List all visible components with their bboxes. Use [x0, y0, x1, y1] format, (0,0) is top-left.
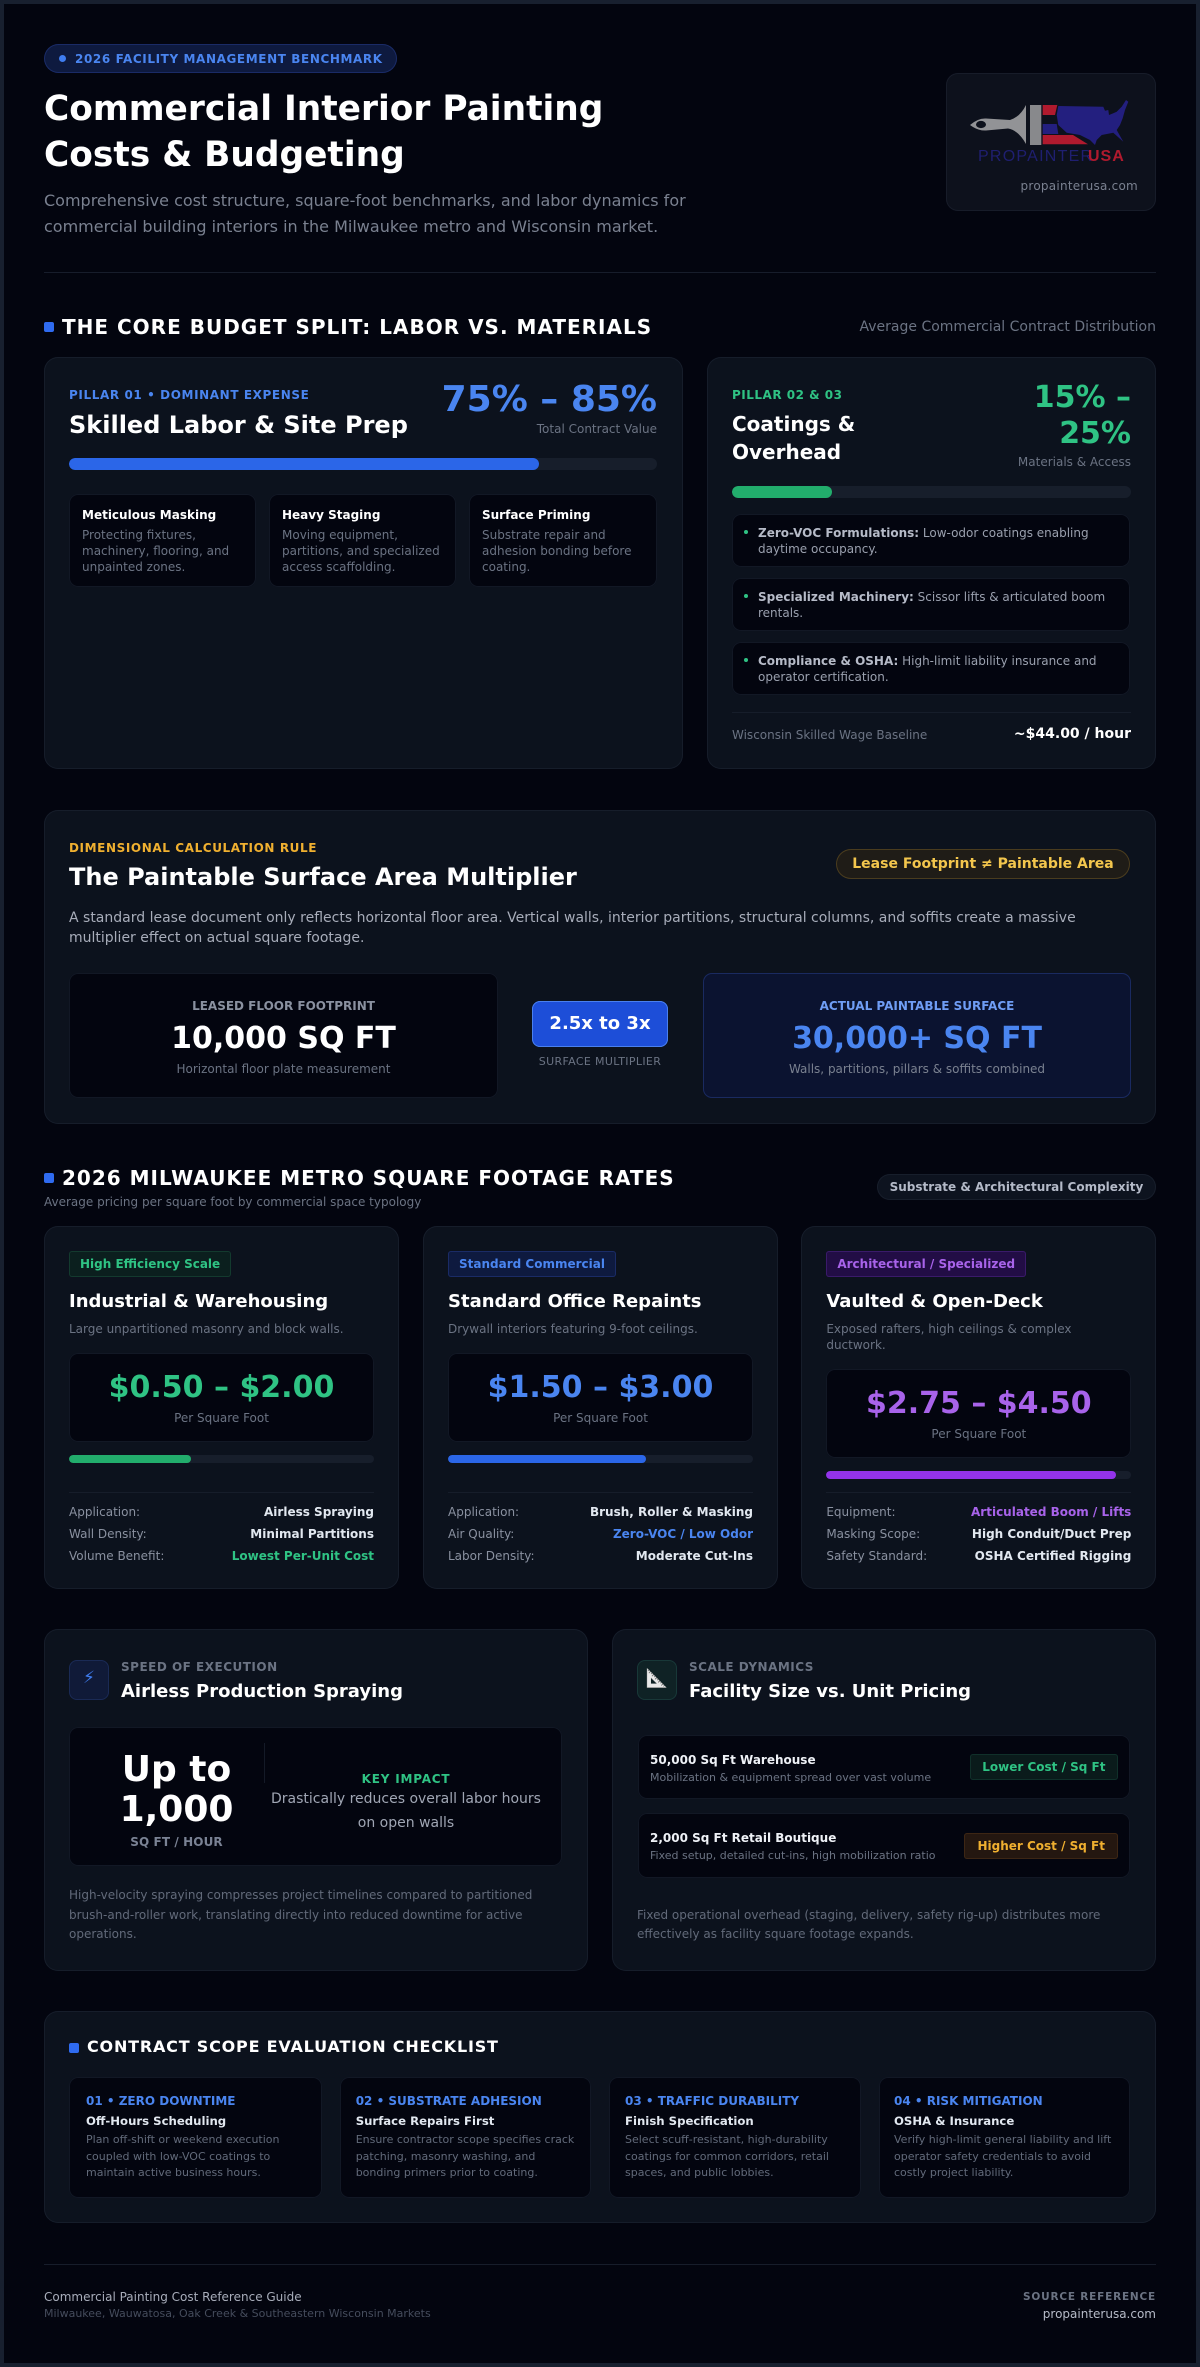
price box [69, 1353, 374, 1442]
footer markets: Milwaukee, Wauwatosa, Oak Creek & Southeastern Wisconsin Markets [44, 2307, 431, 2320]
bullet [744, 594, 748, 598]
key impact text: Drastically reduces overall labor hours [271, 1791, 541, 1807]
row: masking scope [826, 1527, 1131, 1541]
row: masking scope: High Conduit/Duct Prep [972, 1527, 1131, 1541]
key impact label: KEY IMPACT [362, 1772, 450, 1786]
item text [758, 526, 1089, 556]
description [69, 910, 1076, 946]
card title: Surface Priming [482, 508, 590, 522]
row: boutique [638, 1813, 1130, 1878]
price bar [826, 1471, 1131, 1479]
cost badge [970, 1754, 1118, 1780]
badge: benchmark [44, 44, 397, 73]
step text: Select scuff-resistant, high-durability [625, 2133, 828, 2146]
marker [44, 322, 54, 332]
section heading: budget split [44, 315, 1156, 339]
eyebrow: SPEED OF EXECUTION [121, 1660, 278, 1674]
card text: access scaffolding. [282, 560, 395, 574]
checklist card 1 [69, 2077, 322, 2198]
unit: Per Square Foot [931, 1427, 1026, 1441]
card: masking [69, 494, 256, 587]
step text: coatings for common corridors, retail [625, 2150, 829, 2162]
spray rate box [69, 1727, 562, 1866]
subtitle: Comprehensive cost structure, square-foot benchmarks, and labor dynamics for [44, 191, 686, 210]
item: compliance [732, 642, 1130, 695]
pillar label: PILLAR 01 • DOMINANT EXPENSE [69, 388, 309, 402]
wage label: Wisconsin Skilled Wage Baseline [732, 728, 927, 742]
rule label: DIMENSIONAL CALCULATION RULE [69, 841, 317, 855]
materials bar fill [732, 486, 832, 498]
panel: surface area multiplier [44, 810, 1156, 1124]
step text: patching, masonry washing, and [356, 2150, 535, 2162]
cost badge [964, 1833, 1118, 1859]
price bar fill [448, 1455, 646, 1463]
row: wall density: Minimal Partitions [250, 1527, 374, 1541]
card title: Heavy Staging [282, 508, 380, 522]
row: labor density: Moderate Cut-Ins [636, 1549, 753, 1563]
rate value: 1,000 [120, 1789, 233, 1830]
title: Costs & Budgeting [44, 134, 405, 174]
callout pill [836, 849, 1130, 879]
card description: ductwork. [826, 1338, 886, 1352]
note: Walls, partitions, pillars & soffits combined [789, 1062, 1045, 1076]
panel title: Airless Production Spraying [121, 1681, 403, 1702]
step text [86, 2133, 280, 2179]
item text [758, 654, 1097, 684]
price bar fill [826, 1471, 1116, 1479]
complexity pill: Substrate & Architectural Complexity [890, 1180, 1143, 1194]
step label: 01 • ZERO DOWNTIME [86, 2094, 235, 2108]
explanation [637, 1908, 1100, 1941]
step text: Ensure contractor scope specifies crack [356, 2133, 574, 2146]
step text: spaces, and public lobbies. [625, 2166, 774, 2179]
row: application: Airless Spraying [264, 1505, 374, 1519]
row: safety standard: OSHA Certified Rigging [975, 1549, 1131, 1563]
rate unit: SQ FT / HOUR [130, 1835, 223, 1849]
row: equipment: Articulated Boom / Lifts [971, 1505, 1131, 1519]
item text: Zero-VOC Formulations: Low-odor coatings enabling [758, 526, 1089, 540]
multiplier badge: 2.5x to 3x [549, 1013, 651, 1034]
panel: facility size vs unit pricing [612, 1629, 1156, 1971]
section heading: square footage rates [44, 1166, 1156, 1209]
panel: contract scope checklist [44, 2011, 1156, 2223]
row note: Mobilization & equipment spread over vast volume [650, 1771, 931, 1784]
item text: Specialized Machinery: Scissor lifts & articulated boom [758, 590, 1105, 604]
row: application [69, 1505, 374, 1519]
badge dot [59, 55, 66, 62]
label: LEASED FLOOR FOOTPRINT [192, 999, 375, 1013]
subtitle [44, 191, 686, 236]
card description: Exposed rafters, high ceilings & complex [826, 1322, 1072, 1336]
panel heading: CONTRACT SCOPE EVALUATION CHECKLIST [87, 2037, 499, 2056]
panel: standard office repaints [423, 1226, 778, 1589]
row: safety standard [826, 1549, 1131, 1563]
logo card [946, 73, 1156, 211]
card title: Standard Office Repaints [448, 1291, 702, 1312]
card text: Protecting fixtures, [82, 528, 196, 542]
step text: coupled with low-VOC coatings to [86, 2150, 270, 2162]
marker [44, 1173, 54, 1183]
section subtitle: Average pricing per square foot by commercial space typology [44, 1195, 421, 1209]
cost badge: Higher Cost / Sq Ft [977, 1839, 1105, 1853]
card title: Vaulted & Open-Deck [826, 1291, 1043, 1312]
row: air quality: Zero-VOC / Low Odor [613, 1527, 753, 1541]
row: air quality: Air Quality: [448, 1527, 514, 1541]
checklist card 2 [340, 2077, 591, 2198]
panel: skilled labor [44, 357, 683, 769]
percentage caption: Materials & Access [1018, 455, 1131, 469]
row: application: Brush, Roller & Masking [590, 1505, 753, 1519]
row title: 50,000 Sq Ft Warehouse [650, 1753, 816, 1767]
explanation: operations. [69, 1927, 137, 1941]
row: equipment [826, 1505, 1131, 1519]
multiplier badge [532, 1001, 668, 1047]
card description [826, 1322, 1072, 1352]
item text: rentals. [758, 606, 803, 620]
tag: High Efficiency Scale [80, 1257, 220, 1271]
card text [282, 528, 440, 574]
percentage [1034, 380, 1131, 451]
card: staging [269, 494, 456, 587]
card text: coating. [482, 560, 530, 574]
rate value: Up to [122, 1749, 231, 1790]
step label: 02 • SUBSTRATE ADHESION [356, 2094, 542, 2108]
card title: Industrial & Warehousing [69, 1291, 328, 1312]
row: masking scope: Masking Scope: [826, 1527, 920, 1541]
row: safety standard: Safety Standard: [826, 1549, 927, 1563]
icon: lightning bolt [69, 1660, 109, 1700]
row: volume benefit: Lowest Per-Unit Cost [232, 1549, 374, 1563]
unit: Per Square Foot [553, 1411, 648, 1425]
icon: paintbrush and USA map logo [970, 100, 1128, 165]
step title: Off-Hours Scheduling [86, 2114, 226, 2128]
tag [448, 1251, 616, 1277]
price: $2.75 – $4.50 [866, 1386, 1092, 1421]
row: equipment: Equipment: [826, 1505, 896, 1519]
step text: costly project liability. [894, 2166, 1013, 2179]
row title: 2,000 Sq Ft Retail Boutique [650, 1831, 836, 1845]
tag [69, 1251, 231, 1277]
price: $0.50 – $2.00 [109, 1370, 334, 1405]
actual surface box [703, 973, 1131, 1098]
wage value: ~$44.00 / hour [1014, 726, 1131, 742]
percentage: 15% – [1034, 380, 1131, 415]
label: ACTUAL PAINTABLE SURFACE [820, 999, 1014, 1013]
leased footprint box [69, 973, 498, 1098]
explanation [69, 1888, 532, 1941]
card text [482, 528, 631, 574]
labor bar [69, 458, 657, 470]
bullet [744, 658, 748, 662]
card description: Drywall interiors featuring 9-foot ceilings. [448, 1322, 698, 1336]
icon: paintbrush and USA map logo: PROPAINTER [978, 148, 1093, 165]
value: 10,000 SQ FT [171, 1021, 396, 1056]
pillar label: PILLAR 02 & 03 [732, 388, 842, 402]
value: 30,000+ SQ FT [792, 1021, 1042, 1056]
section title: THE CORE BUDGET SPLIT: LABOR VS. MATERIALS [62, 315, 652, 339]
header [44, 44, 1156, 273]
row note: Fixed setup, detailed cut-ins, high mobilization ratio [650, 1849, 936, 1862]
row: labor density [448, 1549, 753, 1563]
step text: Plan off-shift or weekend execution [86, 2133, 280, 2146]
panel: airless production spraying [44, 1629, 588, 1971]
note: Horizontal floor plate measurement [176, 1062, 390, 1076]
item: zero-VOC [732, 514, 1130, 567]
panel title [732, 412, 855, 464]
card text: Moving equipment, [282, 528, 398, 542]
row: labor density: Labor Density: [448, 1549, 535, 1563]
checklist card 3 [609, 2077, 861, 2198]
item text: operator certification. [758, 670, 889, 684]
row: wall density [69, 1527, 374, 1541]
step label: 04 • RISK MITIGATION [894, 2094, 1043, 2108]
row: application [448, 1505, 753, 1519]
badge text: 2026 FACILITY MANAGEMENT BENCHMARK [75, 52, 383, 66]
card text: unpainted zones. [82, 560, 185, 574]
price: $1.50 – $3.00 [488, 1370, 713, 1405]
bullet [744, 530, 748, 534]
row: application: Application: [69, 1505, 140, 1519]
panel title: The Paintable Surface Area Multiplier [69, 863, 577, 891]
complexity pill [877, 1174, 1156, 1200]
checklist card 4 [879, 2077, 1130, 2198]
explanation: brush-and-roller work, translating directly into reduced downtime for active [69, 1908, 522, 1922]
percentage: 75% – 85% [442, 379, 657, 420]
title [44, 88, 603, 174]
logo url: propainterusa.com [1021, 179, 1138, 193]
panel title: Overhead [732, 440, 841, 464]
subtitle: commercial building interiors in the Milwaukee metro and Wisconsin market. [44, 217, 658, 236]
source label: SOURCE REFERENCE [1023, 2291, 1156, 2303]
key impact text: on open walls [358, 1815, 454, 1831]
row: wall density: Wall Density: [69, 1527, 147, 1541]
multiplier caption: SURFACE MULTIPLIER [539, 1055, 661, 1068]
panel: industrial and warehousing [44, 1226, 399, 1589]
title: Commercial Interior Painting [44, 88, 603, 128]
card text: machinery, flooring, and [82, 544, 229, 558]
panel: coatings and overhead [707, 357, 1156, 769]
rate value [120, 1749, 233, 1830]
price bar [448, 1455, 753, 1463]
header divider [44, 272, 1156, 273]
cost badge: Lower Cost / Sq Ft [982, 1760, 1106, 1774]
step text [894, 2133, 1112, 2179]
step title: Surface Repairs First [356, 2114, 494, 2128]
item text: Compliance & OSHA: High-limit liability insurance and [758, 654, 1097, 668]
step text: Verify high-limit general liability and lift [894, 2133, 1111, 2146]
section title: 2026 MILWAUKEE METRO SQUARE FOOTAGE RATES [62, 1166, 675, 1190]
step title: OSHA & Insurance [894, 2114, 1014, 2128]
callout pill: Lease Footprint ≠ Paintable Area [852, 856, 1114, 872]
panel title: Facility Size vs. Unit Pricing [689, 1681, 971, 1702]
materials bar [732, 486, 1131, 498]
section note: Average Commercial Contract Distribution [860, 319, 1156, 335]
row: air quality [448, 1527, 753, 1541]
row: volume benefit [69, 1549, 374, 1563]
description: multiplier effect on actual square footage. [69, 930, 364, 946]
ruler glyph: 📐 [646, 1668, 668, 1689]
card text: adhesion bonding before [482, 544, 631, 558]
percentage caption: Total Contract Value [537, 422, 657, 436]
panel title: Skilled Labor & Site Prep [69, 411, 408, 439]
labor bar fill [69, 458, 539, 470]
description: A standard lease document only reflects horizontal floor area. Vertical walls, interior partitions, structural columns, and soffits create a massive [69, 910, 1076, 926]
card text: partitions, and specialized [282, 544, 440, 558]
eyebrow: SCALE DYNAMICS [689, 1660, 814, 1674]
price bar fill [69, 1455, 191, 1463]
item text: daytime occupancy. [758, 542, 878, 556]
price bar [69, 1455, 374, 1463]
card text: Substrate repair and [482, 528, 606, 542]
card text [82, 528, 229, 574]
unit: Per Square Foot [174, 1411, 269, 1425]
step title: Finish Specification [625, 2114, 754, 2128]
source url: propainterusa.com [1043, 2307, 1156, 2321]
step text [625, 2133, 829, 2179]
footer [44, 2264, 1156, 2321]
icon: triangular ruler [637, 1660, 677, 1700]
key impact text [271, 1791, 541, 1831]
explanation: Fixed operational overhead (staging, delivery, safety rig-up) distributes more [637, 1908, 1100, 1922]
footer title: Commercial Painting Cost Reference Guide [44, 2290, 302, 2304]
icon: lightning bolt: ⚡ [83, 1668, 95, 1688]
tag [826, 1251, 1026, 1277]
explanation: High-velocity spraying compresses project timelines compared to partitioned [69, 1888, 532, 1902]
card title: Meticulous Masking [82, 508, 216, 522]
row: application: Application: [448, 1505, 519, 1519]
card: priming [469, 494, 657, 587]
card description: Large unpartitioned masonry and block walls. [69, 1322, 344, 1336]
step text: operator safety credentials to avoid [894, 2150, 1091, 2162]
percentage: 25% [1059, 416, 1131, 451]
item text [758, 590, 1105, 620]
step label: 03 • TRAFFIC DURABILITY [625, 2094, 799, 2108]
tag: Architectural / Specialized [837, 1257, 1015, 1271]
marker [69, 2043, 79, 2053]
price box [448, 1353, 753, 1442]
item: machinery [732, 578, 1130, 631]
panel: vaulted and open-deck [801, 1226, 1156, 1589]
row: volume benefit: Volume Benefit: [69, 1549, 164, 1563]
price box [826, 1369, 1131, 1458]
step text: bonding primers prior to coating. [356, 2166, 538, 2179]
row: warehouse [638, 1735, 1130, 1799]
tag: Standard Commercial [459, 1257, 605, 1271]
step text: maintain active business hours. [86, 2166, 261, 2179]
icon: paintbrush and USA map logo: USA [1088, 148, 1125, 165]
explanation: effectively as facility square footage expands. [637, 1927, 914, 1941]
panel title: Coatings & [732, 412, 855, 436]
step text [356, 2133, 574, 2179]
